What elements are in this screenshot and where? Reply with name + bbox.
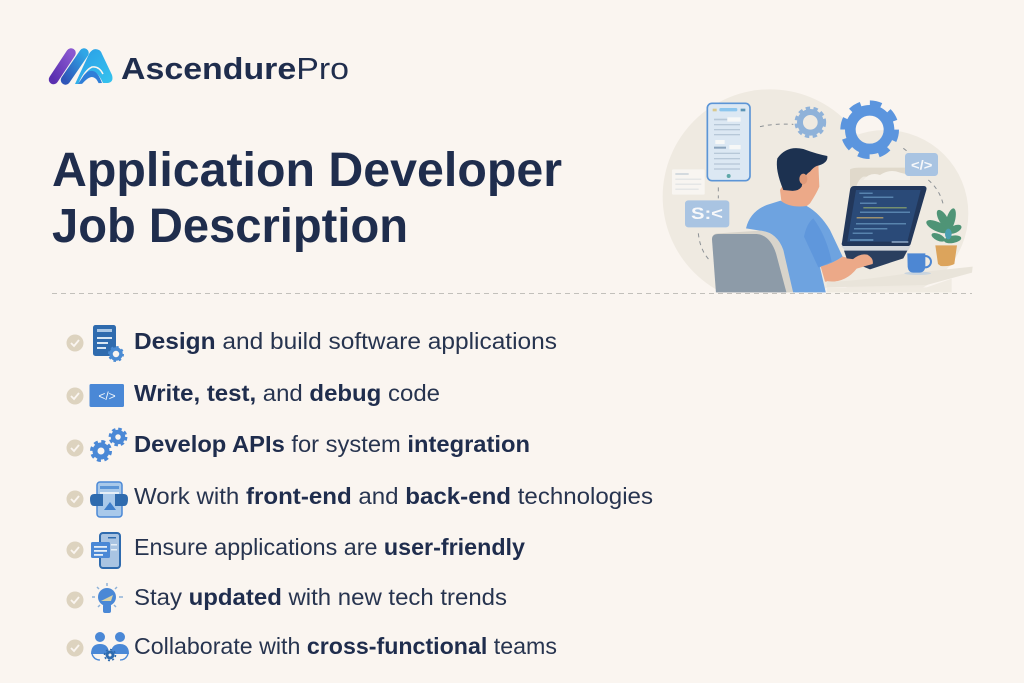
check bullet bbox=[66, 388, 84, 404]
check bullet bbox=[66, 640, 84, 656]
code badge left bbox=[685, 200, 729, 227]
icon: document with gear bbox=[93, 325, 123, 361]
icon: two gears bbox=[92, 429, 126, 460]
logo bbox=[54, 49, 349, 86]
coffee mug bbox=[904, 253, 931, 275]
item 4: front-end and back-end bbox=[66, 482, 653, 517]
background blobs bbox=[663, 89, 968, 304]
text: Develop APIs for system integration bbox=[134, 431, 530, 457]
dashed connectors bbox=[698, 124, 943, 260]
floating note card bbox=[672, 169, 705, 195]
check bullet bbox=[66, 490, 84, 508]
text: Collaborate with cross-functional teams bbox=[134, 633, 557, 659]
icon: phone with chat card bbox=[91, 533, 120, 568]
illustration: developer at laptop bbox=[663, 89, 973, 304]
logo wordmark: Ascendure Pro bbox=[121, 51, 349, 86]
icon: team with gear bbox=[91, 632, 129, 660]
hand on keyboard bbox=[853, 254, 873, 269]
chair bbox=[712, 231, 795, 293]
check bullet bbox=[66, 592, 84, 608]
person bbox=[746, 148, 873, 293]
icon: light bulb bbox=[92, 583, 123, 613]
text: Work with front-end and back-end technologies bbox=[134, 483, 653, 509]
laptop bbox=[841, 186, 927, 269]
text: Write, test, and debug code bbox=[134, 380, 440, 406]
item 5: user-friendly bbox=[66, 533, 525, 568]
desk bbox=[827, 267, 973, 293]
text: Design and build software applications bbox=[134, 328, 557, 354]
item 1: design and build bbox=[66, 325, 557, 361]
t-shirt bbox=[746, 201, 843, 293]
small gear bbox=[796, 108, 824, 136]
icon: app screen with devices bbox=[90, 482, 128, 517]
ear bbox=[799, 174, 807, 184]
item 7: collaborate bbox=[66, 632, 557, 660]
item 2: write test debug bbox=[66, 380, 440, 407]
code bubble right bbox=[850, 153, 938, 189]
title bbox=[52, 144, 562, 253]
item 6: stay updated bbox=[66, 583, 507, 613]
title: Job Description bbox=[52, 200, 408, 253]
logo mark bbox=[54, 49, 112, 84]
forearm bbox=[820, 256, 864, 282]
text: Ensure applications are user-friendly bbox=[134, 534, 525, 560]
code badge left: S:< bbox=[691, 204, 723, 223]
dashed divider bbox=[52, 292, 972, 294]
text: Stay updated with new tech trends bbox=[134, 584, 507, 610]
sleeve shade bbox=[804, 218, 832, 267]
neck and face bbox=[780, 166, 820, 206]
large gear bbox=[844, 104, 896, 156]
title: Application Developer bbox=[52, 144, 562, 197]
code bubble right: </> bbox=[911, 158, 932, 172]
potted plant bbox=[924, 207, 963, 266]
check bullet bbox=[66, 334, 84, 352]
item 3: develop APIs bbox=[66, 429, 530, 460]
icon: code tag: </> bbox=[98, 389, 116, 403]
icon: code tag bbox=[90, 384, 124, 407]
check bullet bbox=[66, 542, 84, 558]
hair bbox=[777, 148, 827, 191]
responsibilities list bbox=[66, 325, 653, 660]
phone mockup bbox=[707, 103, 750, 181]
check bullet bbox=[66, 440, 84, 456]
